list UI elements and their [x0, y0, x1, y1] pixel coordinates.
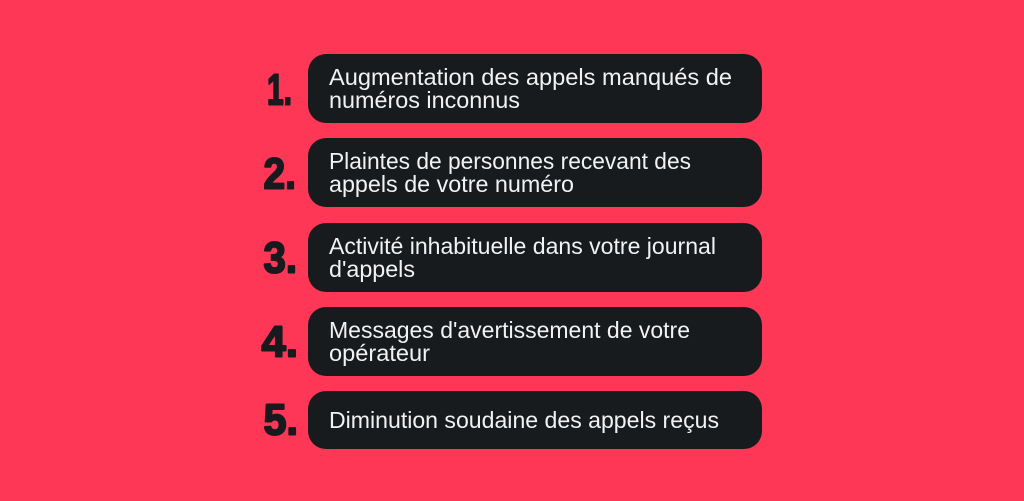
card 2 text: appels de votre numéro	[329, 171, 574, 197]
card 1 text	[329, 64, 732, 113]
card 2 text	[329, 148, 691, 197]
list item 1	[267, 54, 762, 123]
card 2 text: Plaintes de personnes recevant des	[329, 148, 691, 174]
number 3: 3.	[264, 234, 297, 282]
card 3 text: Activité inhabituelle dans votre journal	[329, 233, 716, 259]
number 1: 1.	[267, 66, 292, 114]
card 2	[308, 138, 762, 207]
card 4 text	[329, 317, 690, 366]
card 4 text: opérateur	[329, 340, 430, 366]
card 1 text: Augmentation des appels manqués de	[329, 64, 732, 90]
list item 4	[262, 307, 762, 376]
card 1	[308, 54, 762, 123]
card 5	[308, 391, 762, 449]
card 3 text: d'appels	[329, 256, 415, 282]
card 3 text	[329, 233, 716, 282]
number 5: 5.	[264, 396, 298, 444]
list item 5	[264, 391, 762, 449]
card 5 text: Diminution soudaine des appels reçus	[329, 407, 719, 433]
number 2: 2.	[264, 150, 296, 198]
card 4 text: Messages d'avertissement de votre	[329, 317, 690, 343]
list item 2	[264, 138, 762, 207]
number 4: 4.	[262, 318, 298, 366]
card 4	[308, 307, 762, 376]
list item 3	[264, 223, 762, 292]
card 3	[308, 223, 762, 292]
card 1 text: numéros inconnus	[329, 87, 520, 113]
